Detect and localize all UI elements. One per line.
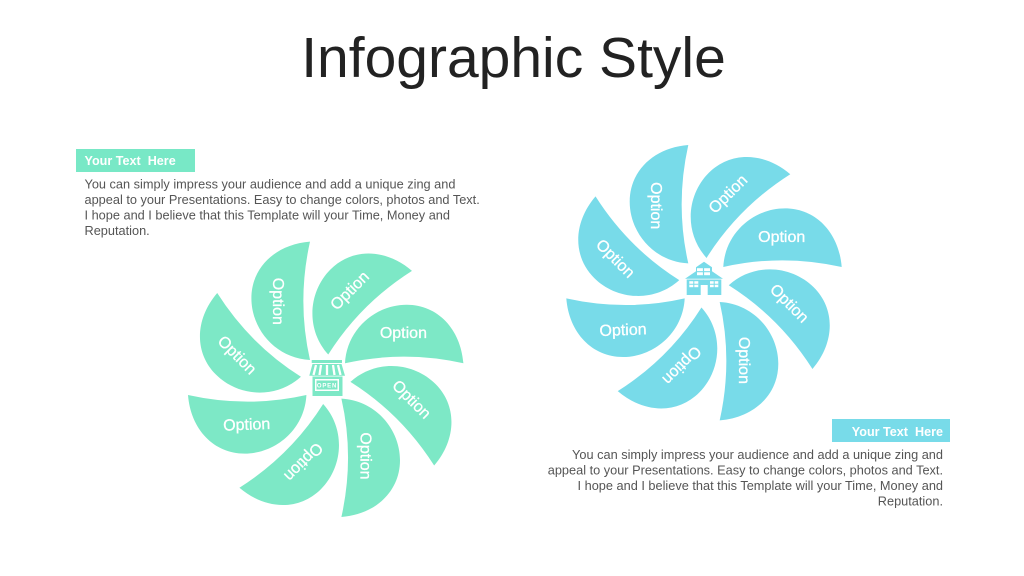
text block: left — [76, 149, 480, 238]
petal 1 — [345, 305, 463, 363]
petal 7 — [630, 145, 688, 263]
petal 2: Option — [766, 281, 812, 327]
petal 4: Option — [280, 439, 326, 484]
petal 5: Option — [223, 416, 271, 435]
petal 8 — [287, 229, 412, 355]
petal 2 — [350, 340, 476, 466]
petal 2 — [729, 244, 854, 369]
green pinwheel — [176, 229, 476, 529]
petal 1: Option — [758, 229, 805, 246]
left paragraph — [84, 176, 480, 238]
petal 5: Option — [599, 321, 647, 340]
left paragraph: appeal to your Presentations. Easy to change colors, photos and Text. — [84, 192, 480, 207]
petal 4 — [239, 404, 365, 529]
petal 6: Option — [592, 236, 638, 282]
left paragraph: I hope and I believe that this Template will your Time, Money and — [84, 208, 450, 222]
petal 6 — [554, 196, 679, 322]
left paragraph: You can simply impress your audience and add a unique zing and — [84, 176, 455, 192]
petal 3 — [341, 399, 400, 517]
petal 3: Option — [735, 337, 752, 384]
right paragraph: You can simply impress your audience and add a unique zing and — [572, 447, 943, 462]
petal 6 — [176, 293, 301, 418]
icon: shop: OPEN — [317, 383, 337, 389]
petal 7: Option — [647, 182, 664, 229]
petal 5 — [566, 298, 685, 357]
text block: right — [548, 419, 950, 508]
right paragraph: Reputation. — [878, 494, 943, 508]
petal 4 — [618, 307, 743, 433]
right paragraph: appeal to your Presentations. Easy to change colors, photos and Text. — [548, 462, 943, 478]
petal 3 — [720, 302, 778, 420]
left paragraph: Reputation. — [84, 223, 150, 238]
petal 1 — [723, 208, 842, 267]
petal 6: Option — [214, 333, 259, 378]
petal 1: Option — [380, 325, 427, 342]
petal 7 — [251, 242, 310, 360]
right paragraph: I hope and I believe that this Template will your Time, Money and — [578, 478, 943, 493]
petal 8: Option — [706, 172, 751, 217]
title: Infographic Style — [301, 26, 726, 90]
petal 8: Option — [328, 268, 373, 314]
icon: shop — [309, 360, 345, 396]
petal 7: Option — [269, 278, 286, 325]
petal 3: Option — [357, 432, 374, 480]
label: right heading — [832, 419, 950, 442]
petal 8 — [665, 133, 790, 258]
petal 5 — [188, 395, 306, 454]
label: left heading: Your Text Here — [84, 154, 176, 168]
icon: house — [685, 262, 723, 295]
right paragraph — [548, 447, 943, 508]
petal 4: Option — [659, 342, 704, 388]
label: right heading: Your Text Here — [852, 425, 943, 439]
blue pinwheel — [554, 133, 854, 433]
petal 2: Option — [388, 377, 434, 423]
label: left heading — [76, 149, 195, 172]
